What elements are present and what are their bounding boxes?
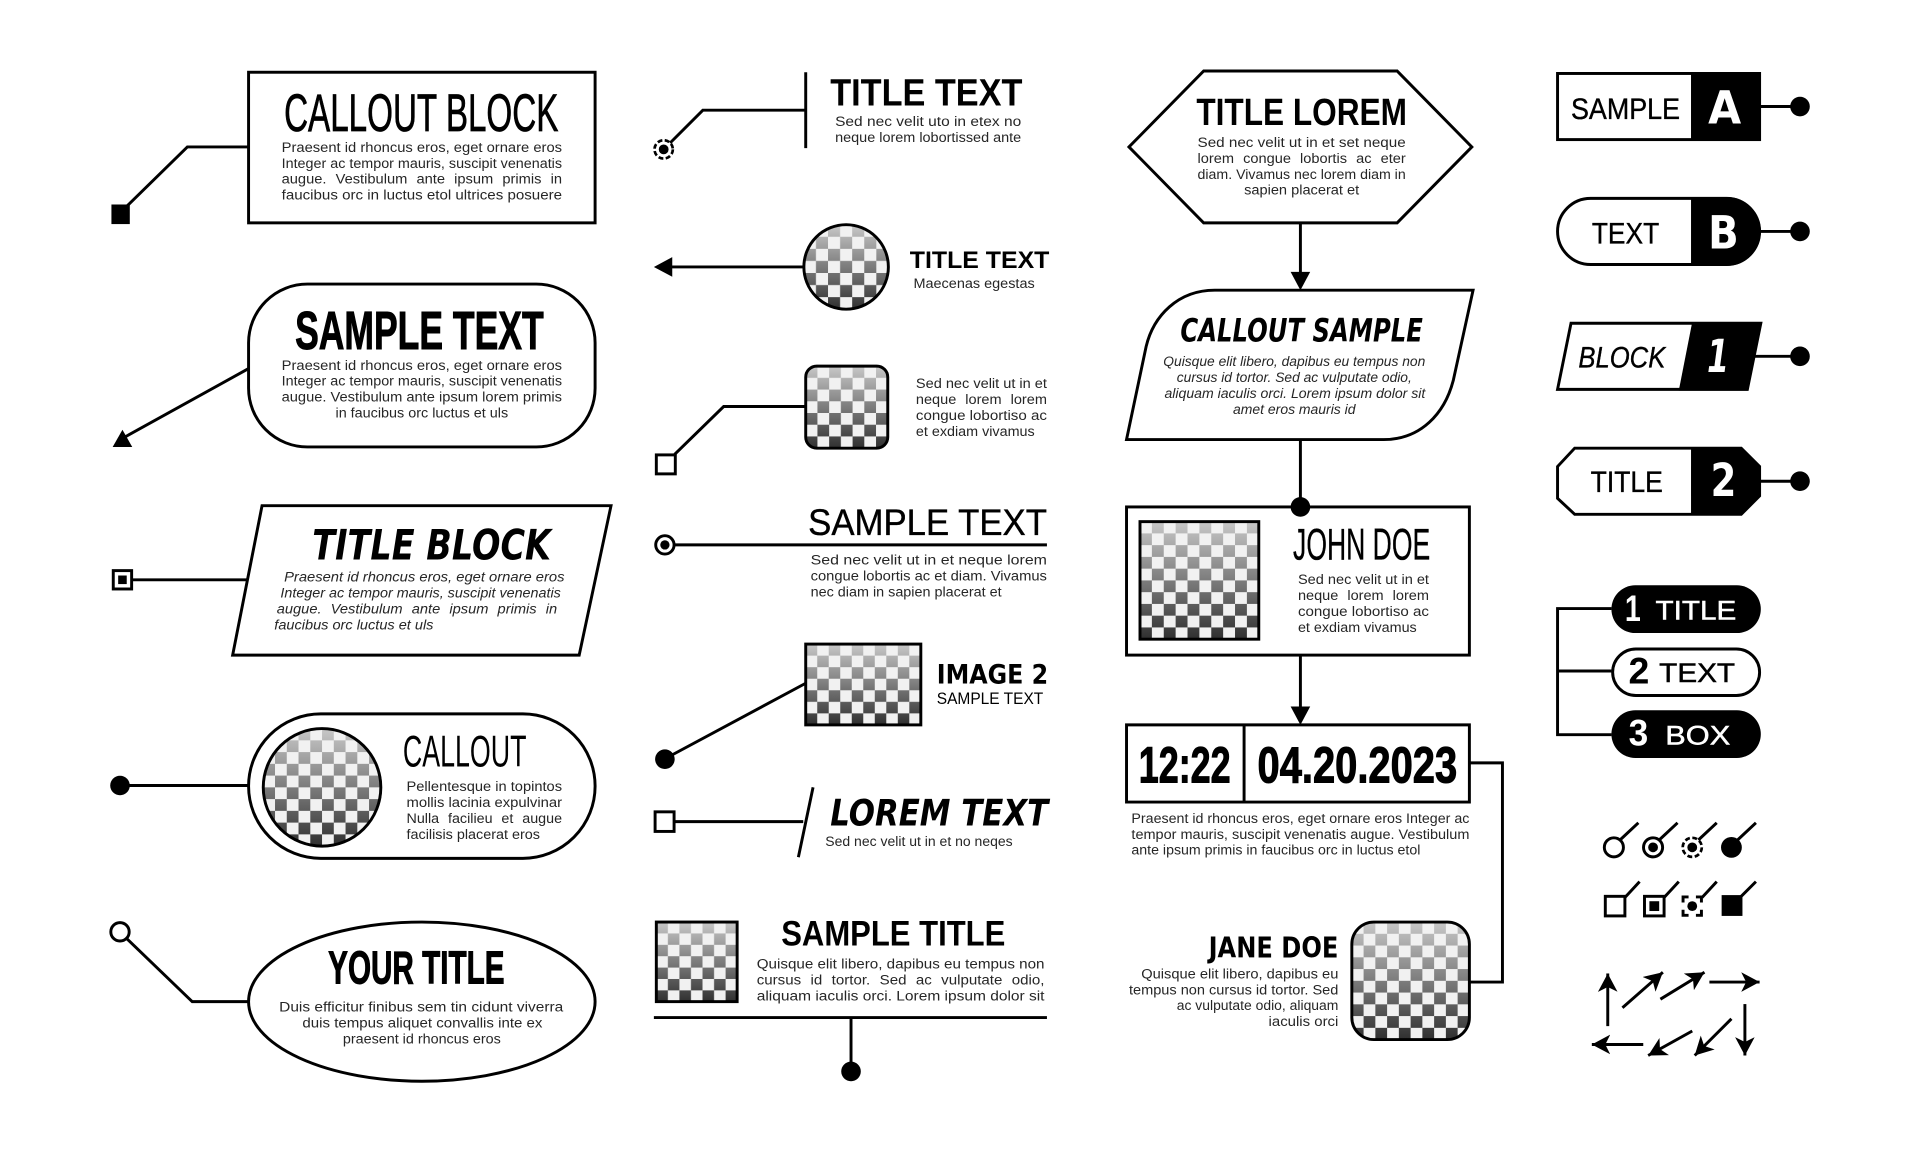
- panel: title text with circle image: [654, 225, 1049, 309]
- leader line with nested square marker: [113, 571, 249, 589]
- body text: diam. Vivamus nec lorem diam in: [1198, 167, 1406, 183]
- tag: sample A: SAMPLE: [1571, 93, 1680, 126]
- panel: image 2: [655, 644, 1048, 769]
- body text: lorem congue lobortis ac eter: [1198, 151, 1406, 167]
- tag: block 1: 1: [1707, 330, 1729, 383]
- heading: TITLE TEXT: [910, 247, 1049, 274]
- body text: neque lorem lorem: [916, 392, 1047, 408]
- image placeholder: rounded square: [1352, 922, 1469, 1040]
- body text: Integer ac tempor mauris, suscipit venenatis: [280, 586, 561, 602]
- body text: [835, 114, 1021, 146]
- body text: Praesent id rhoncus eros, eget ornare eros: [284, 570, 564, 586]
- tag: title 2: TITLE: [1591, 466, 1663, 499]
- image placeholder: rounded square: [806, 366, 888, 448]
- body text: Integer ac tempor mauris, suscipit venenatis: [282, 374, 562, 390]
- arrow: john doe to date box: [1291, 655, 1310, 725]
- body text: Sed nec velit ut in et: [916, 376, 1047, 392]
- heading: JOHN DOE: [1293, 521, 1430, 570]
- body text: et exdiam vivamus: [1298, 620, 1417, 636]
- body text: faucibus orc in luctus etol ultrices posuere: [282, 188, 562, 204]
- body text: aliquam iaculis orci. Lorem ipsum dolor sit: [757, 988, 1045, 1004]
- body text: [407, 779, 562, 843]
- heading: CALLOUT BLOCK: [284, 84, 558, 143]
- body text: Sed nec velit ut in et set neque: [1198, 135, 1406, 151]
- body text: amet eros mauris id: [1233, 402, 1357, 418]
- image placeholder: rectangle: [1140, 522, 1259, 639]
- image placeholder: circle: [804, 225, 888, 309]
- body text: [916, 376, 1047, 440]
- pill: 1 title: [1611, 585, 1761, 633]
- tag: sample A: A: [1708, 82, 1741, 135]
- heading: YOUR TITLE: [328, 941, 504, 993]
- panel: date and time: [1127, 725, 1469, 859]
- time: 12:22: [1139, 735, 1231, 793]
- pill: 3 box: 3: [1629, 713, 1648, 754]
- callout box: [249, 72, 595, 223]
- body text: [811, 552, 1047, 600]
- panel: rounded image with text: [656, 366, 1047, 474]
- panel: sample title with image: [654, 913, 1047, 1081]
- date box: [1127, 725, 1469, 802]
- image placeholder: circle: [263, 729, 381, 846]
- curved parallelogram box: [1127, 290, 1473, 440]
- body text: augue. Vestibulum ante ipsum primis in: [277, 601, 557, 617]
- image placeholder: rectangle: [656, 922, 737, 1002]
- body text: Sed nec velit ut in et: [1298, 572, 1429, 588]
- body text: augue. Vestibulum ante ipsum primis in: [282, 172, 562, 188]
- pill: 3 box: BOX: [1665, 720, 1730, 750]
- body text: [282, 140, 562, 204]
- pill: 1 title: TITLE: [1656, 596, 1736, 626]
- panel: sample text rounded box: [113, 284, 595, 447]
- body text: Quisque elit libero, dapibus eu: [1141, 966, 1338, 982]
- parallelogram box: [233, 506, 611, 655]
- body text: congue lobortiso ac: [916, 408, 1047, 424]
- body text: mollis lacinia expulvinar: [407, 795, 562, 811]
- body text: cursus id tortor. Sed ac vulputate odio,: [757, 972, 1044, 988]
- body text: aliquam iaculis orci. Lorem ipsum dolor sit: [1164, 386, 1426, 402]
- body text: Sed nec velit ut in et no neqes: [825, 834, 1013, 850]
- numbered list: [1558, 585, 1761, 758]
- body text: Sed nec velit uto in etex no: [835, 114, 1021, 130]
- heading: SAMPLE TEXT: [808, 502, 1047, 543]
- leader line with open square marker: [656, 407, 806, 474]
- tag: text B: [1558, 197, 1810, 266]
- body text: Praesent id rhoncus eros, eget ornare eros: [282, 358, 562, 374]
- body text: augue. Vestibulum ante ipsum lorem primis: [282, 390, 562, 406]
- tag: text B: B: [1708, 207, 1739, 260]
- leader line with open square marker: [655, 787, 813, 857]
- body text: Praesent id rhoncus eros, eget ornare eros Integer ac: [1131, 811, 1469, 827]
- panel: jane doe: [1129, 922, 1469, 1040]
- heading: IMAGE 2: [937, 659, 1048, 690]
- body text: [279, 999, 563, 1047]
- body text: Praesent id rhoncus eros, eget ornare eros: [282, 140, 562, 156]
- leader line with dot marker: [110, 776, 249, 795]
- body text: [757, 957, 1045, 1004]
- ellipse box: [249, 922, 595, 1081]
- body text: nec diam in sapien placerat et: [811, 584, 1002, 600]
- body text: [1163, 354, 1426, 418]
- body text: cursus id tortor. Sed ac vulputate odio,: [1177, 370, 1412, 386]
- heading: LOREM TEXT: [830, 791, 1051, 834]
- tag: title 2: 2: [1711, 454, 1736, 507]
- heading: JANE DOE: [1207, 932, 1338, 965]
- body text: iaculis orci: [1269, 1014, 1338, 1030]
- tag: title 2: [1558, 447, 1810, 516]
- pill: 2 text: [1613, 649, 1760, 696]
- heading: TITLE TEXT: [830, 72, 1022, 114]
- panel: callout pill with image: [110, 714, 595, 858]
- hexagon box: [1129, 71, 1472, 223]
- panel: title block parallelogram: [113, 506, 611, 655]
- tag: block 1: BLOCK: [1578, 341, 1667, 374]
- icons: circle markers: [1604, 823, 1756, 858]
- connector: date box to jane doe: [1469, 763, 1502, 982]
- body text: in faucibus orc luctus et uls: [336, 406, 508, 422]
- body text: faucibus orc luctus et uls: [274, 617, 433, 633]
- body text: ac vulputate odio, aliquam: [1177, 998, 1338, 1014]
- image placeholder: rectangle: [806, 644, 921, 725]
- body text: Pellentesque in topintos: [407, 779, 562, 795]
- body text: praesent id rhoncus eros: [343, 1031, 501, 1047]
- panel: john doe: [1127, 440, 1469, 655]
- caption: SAMPLE TEXT: [937, 689, 1043, 708]
- leader line with open circle marker: [111, 923, 249, 1002]
- panel: callout block: [111, 72, 595, 224]
- leader line with ring marker: [656, 536, 1047, 554]
- panel: callout sample: [1127, 290, 1473, 440]
- pill: 3 box: [1611, 710, 1761, 758]
- body text: Integer ac tempor mauris, suscipit venenatis: [282, 156, 562, 172]
- panel: title text with vertical bar: [654, 72, 1022, 159]
- heading: SAMPLE TITLE: [781, 913, 1005, 953]
- leader line with square marker: [111, 147, 249, 224]
- icons: arrows: [1592, 972, 1760, 1056]
- tag: block 1: [1558, 322, 1810, 391]
- heading: CALLOUT: [403, 728, 527, 777]
- panel: title lorem hexagon: [1129, 71, 1472, 223]
- body text: [274, 570, 564, 633]
- heading: SAMPLE TEXT: [295, 301, 544, 361]
- heading: TITLE LOREM: [1196, 92, 1407, 134]
- body text: ante ipsum primis in faucibus orc in luctus etol: [1131, 843, 1420, 859]
- body text: sapien placerat et: [1244, 183, 1359, 199]
- leader line with triangle marker: [113, 369, 249, 447]
- body text: [1298, 572, 1429, 636]
- list bracket: [1558, 609, 1611, 735]
- body text: Quisque elit libero, dapibus eu tempus non: [1163, 354, 1425, 370]
- caption: Maecenas egestas: [913, 276, 1035, 292]
- body text: congue lobortis ac et diam. Vivamus: [811, 568, 1047, 584]
- body text: Sed nec velit ut in et neque lorem: [811, 552, 1047, 568]
- leader line with dot marker: [654, 1018, 1047, 1081]
- leader line with dashed marker: [654, 72, 806, 159]
- body text: Duis efficitur finibus sem tin cidunt viverra: [279, 999, 563, 1015]
- panel: lorem text with slanted bar: [655, 787, 1051, 857]
- body text: neque lorem lorem: [1298, 588, 1429, 604]
- connector with dot: [1291, 440, 1310, 517]
- icons: square markers: [1605, 882, 1756, 916]
- body text: Nulla facilieu et augue: [407, 811, 562, 827]
- heading: CALLOUT SAMPLE: [1180, 312, 1423, 350]
- body text: Quisque elit libero, dapibus eu tempus non: [757, 957, 1044, 973]
- date: 04.20.2023: [1258, 735, 1457, 793]
- tag: sample A: [1558, 72, 1810, 141]
- body text: [282, 358, 562, 422]
- body text: neque lorem lobortissed ante: [835, 130, 1021, 146]
- leader line with dot marker: [655, 683, 806, 769]
- pill: 1 title: 1: [1625, 588, 1641, 629]
- body text: duis tempus aliquet convallis inte ex: [302, 1015, 542, 1031]
- body text: tempus non cursus id tortor. Sed: [1129, 982, 1338, 998]
- arrow pointing left: [654, 257, 804, 277]
- panel: sample text with underline: [656, 502, 1047, 600]
- rounded box: [249, 284, 595, 447]
- pill box: [249, 714, 595, 858]
- body text: [1129, 966, 1338, 1030]
- pill: 2 text: TEXT: [1659, 658, 1735, 688]
- body text: tempor mauris, suscipit venenatis augue. Vestibulum: [1131, 827, 1469, 843]
- body text: [1131, 811, 1469, 859]
- profile box: [1127, 507, 1469, 655]
- body text: [1198, 135, 1406, 199]
- arrow: hexagon to callout sample: [1291, 223, 1310, 290]
- panel: your title ellipse: [111, 922, 595, 1081]
- tag: text B: TEXT: [1592, 218, 1659, 251]
- body text: facilisis placerat eros: [407, 827, 540, 843]
- body text: congue lobortiso ac: [1298, 604, 1429, 620]
- heading: TITLE BLOCK: [312, 521, 553, 570]
- pill: 2 text: 2: [1629, 650, 1649, 691]
- body text: et exdiam vivamus: [916, 424, 1035, 440]
